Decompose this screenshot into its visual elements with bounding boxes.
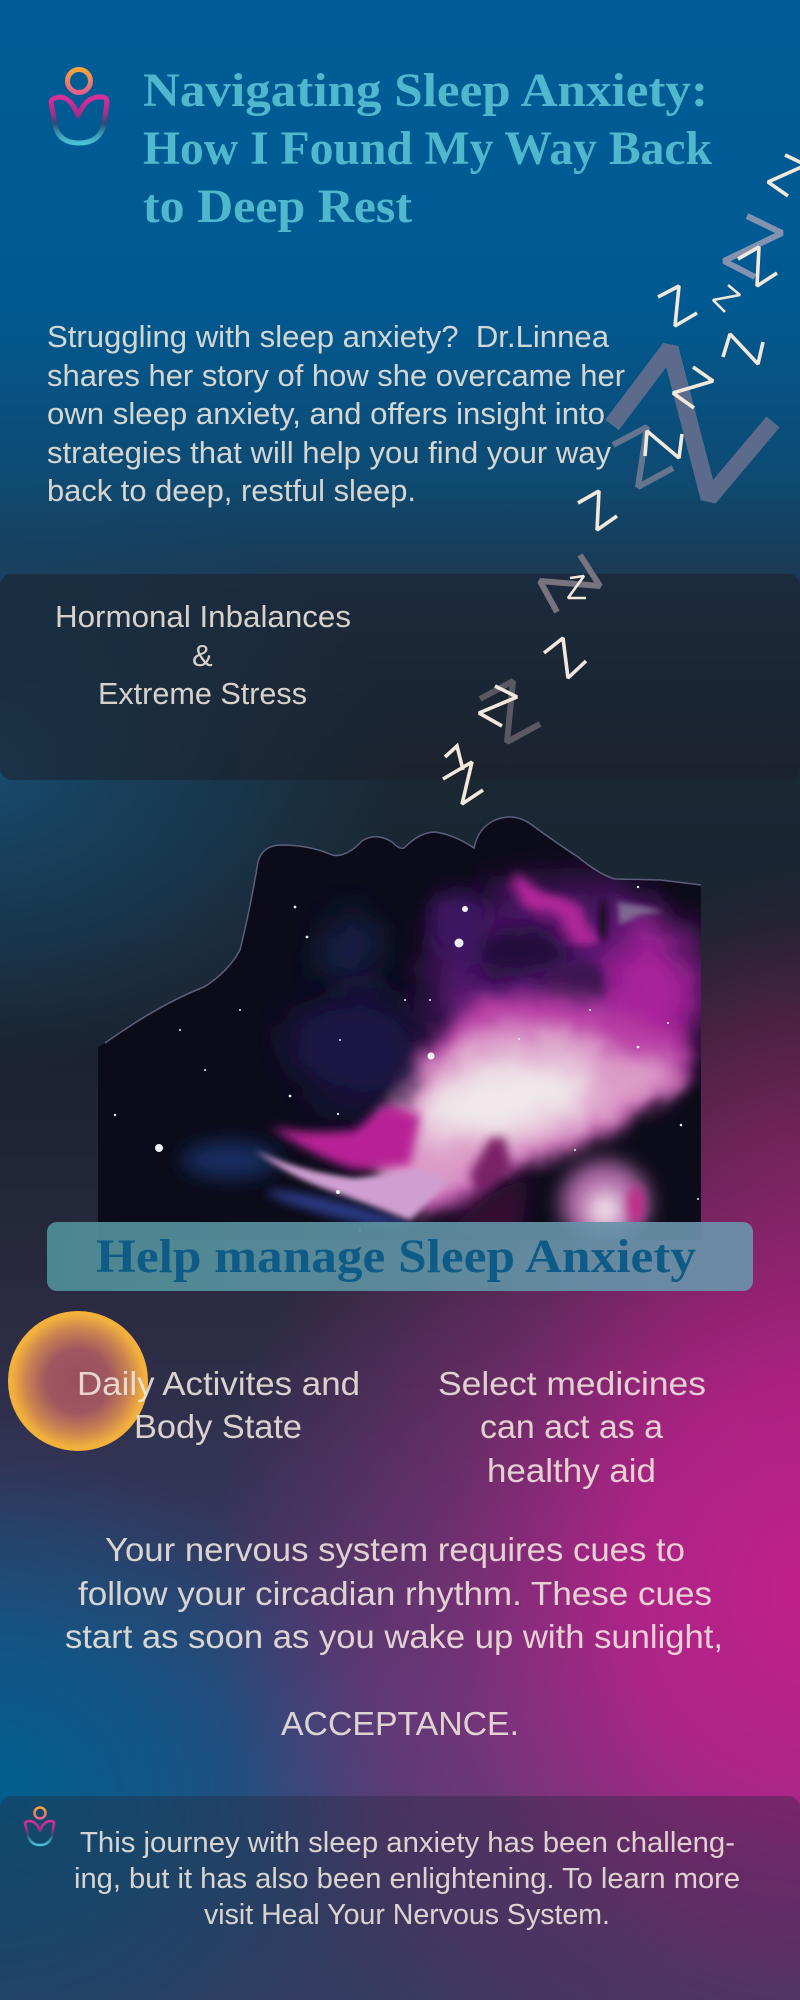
acceptance: ACCEPTANCE.: [281, 1705, 519, 1742]
intro text: [47, 319, 625, 508]
nervous system text: start as soon as you wake up with sunlight,: [65, 1618, 723, 1655]
closing text: This journey with sleep anxiety has been challeng-: [80, 1827, 735, 1859]
nebula face silhouette: [90, 810, 710, 1250]
nervous system text: [65, 1531, 723, 1655]
column: select medicines: can act as a: [480, 1408, 664, 1445]
small cream zs: [443, 155, 800, 804]
nervous system text: follow your circadian rhythm. These cues: [78, 1575, 712, 1612]
small logo icon: [25, 1808, 54, 1845]
panel text: hormonal imbalances and extreme stress: Hormonal Inbalances: [55, 599, 351, 634]
panel text: hormonal imbalances and extreme stress: &: [192, 638, 213, 673]
band: help manage sleep anxiety: Help manage Sleep Anxiety: [96, 1230, 696, 1283]
column: select medicines: [438, 1365, 706, 1489]
panel: closing note: [0, 1796, 800, 2000]
closing text: ing, but it has also been enlightening. To learn more: [74, 1863, 740, 1895]
nebula clouds: [285, 870, 705, 1225]
column: daily activities: Body State: [134, 1408, 302, 1445]
medium grey z on panel: [540, 555, 600, 612]
medium grey z upper: [724, 216, 782, 277]
circle: glowing sun: [8, 1311, 148, 1451]
intro text: own sleep anxiety, and offers insight into: [47, 396, 605, 431]
panel text: hormonal imbalances and extreme stress: Extreme Stress: [98, 676, 307, 711]
intro text: shares her story of how she overcame her: [47, 358, 625, 393]
nebula rim highlight: [105, 817, 701, 1043]
intro text: Struggling with sleep anxiety? Dr.Linnea: [47, 319, 610, 354]
medium grey z lower: [480, 681, 540, 742]
stars: [114, 886, 699, 1231]
intro text: strategies that will help you find your way: [47, 435, 611, 470]
band: help manage sleep anxiety: [47, 1222, 753, 1291]
intro text: back to deep, restful sleep.: [47, 473, 416, 508]
nebula swoosh and streaks: [182, 1142, 278, 1178]
large grey z: [612, 348, 773, 498]
column: select medicines: Select medicines: [438, 1365, 706, 1402]
zzz trail: [443, 155, 800, 804]
column: daily activities: [77, 1365, 360, 1445]
column: select medicines: healthy aid: [487, 1452, 656, 1489]
column: daily activities: Daily Activites and: [77, 1365, 360, 1402]
panel text: hormonal imbalances and extreme stress: [55, 599, 351, 711]
nervous system text: Your nervous system requires cues to: [105, 1531, 685, 1568]
medium grey z middle: [613, 427, 673, 487]
title: How I Found My Way Back: [143, 122, 712, 175]
panel: hormonal imbalances: [0, 574, 800, 780]
closing text: [74, 1827, 740, 1931]
title: [143, 64, 712, 233]
title: Navigating Sleep Anxiety:: [143, 64, 708, 117]
title: to Deep Rest: [143, 180, 412, 233]
closing text: visit Heal Your Nervous System.: [204, 1899, 610, 1931]
logo icon: person in tulip: [51, 70, 107, 143]
